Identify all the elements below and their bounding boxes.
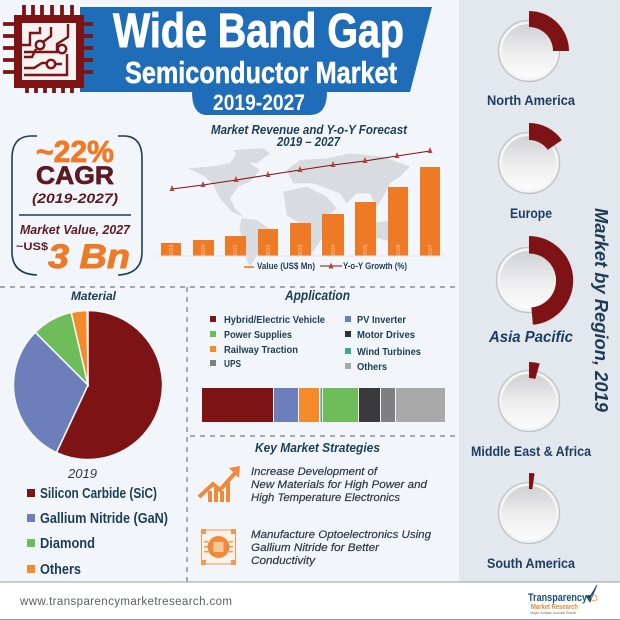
- region: Asia Pacific: [488, 236, 573, 346]
- currency prefix: ~US$: [16, 241, 48, 253]
- title banner: [80, 5, 432, 115]
- application legend: [210, 314, 421, 373]
- logo: Transparency Market Research: Market Research: [531, 602, 578, 611]
- strategy text 1: Increase Development of: [251, 466, 378, 478]
- icon: growth chart: [199, 466, 240, 502]
- application legend: Hybrid/Electric Vehicle: [224, 314, 325, 326]
- world map backdrop: [188, 148, 410, 267]
- region: North America: North America: [487, 93, 575, 108]
- callout: CAGR and market value: [12, 134, 142, 276]
- strategy text 1: New Materials for High Power and: [251, 479, 428, 491]
- bar year labels: 2027: [428, 244, 434, 256]
- panel: application: [202, 287, 445, 422]
- region: Europe: [498, 123, 562, 221]
- logo: Transparency Market Research: Insight. Analysis. Accurate Results: [530, 611, 576, 615]
- application legend: Wind Turbines: [357, 346, 421, 358]
- panel: material: [13, 289, 168, 578]
- application legend: Motor Drives: [357, 329, 415, 341]
- growth line: [170, 147, 432, 191]
- material legend: Diamond: [40, 536, 95, 552]
- region: Asia Pacific: Asia Pacific: [488, 329, 573, 346]
- panel: key market strategies: [199, 441, 432, 567]
- material legend: Silicon Carbide (SiC): [40, 486, 157, 502]
- title years: 2019-2027: [213, 90, 305, 115]
- title line 2: Semiconductor Market: [125, 55, 397, 90]
- bar year labels: 2023: [298, 244, 304, 256]
- material heading: Material: [71, 289, 117, 303]
- logo: Transparency Market Research: Transparency: [528, 592, 588, 604]
- chart legend: Value (US$ Mn): [257, 261, 315, 272]
- bar year labels: 2024: [331, 244, 337, 256]
- CAGR period: (2019-2027): [32, 190, 118, 206]
- bar year labels: [169, 244, 434, 256]
- strategy text 1: High Temperature Electronics: [251, 492, 401, 504]
- bar year labels: 2022: [266, 244, 272, 256]
- strategies heading: Key Market Strategies: [255, 441, 380, 455]
- title line 1: Wide Band Gap: [113, 5, 404, 58]
- chart legend: [244, 261, 407, 272]
- strategy text 1: [251, 466, 428, 504]
- CAGR label: CAGR: [36, 162, 114, 190]
- strategy text 2: Manufacture Optoelectronics Using: [251, 529, 432, 541]
- bar year labels: 2026: [396, 244, 402, 256]
- region: Middle East and Africa: Middle East & Africa: [471, 444, 591, 459]
- application legend: Railway Traction: [224, 344, 298, 356]
- panel: right region background: [459, 0, 620, 582]
- strategy text 2: Gallium Nitride for Better: [251, 542, 380, 554]
- application legend: PV Inverter: [357, 314, 406, 326]
- bar year labels: 2020: [201, 244, 207, 256]
- material legend: Gallium Nitride (GaN): [40, 511, 168, 527]
- bars: [161, 167, 440, 256]
- region: South America: [487, 473, 575, 571]
- market value label: Market Value, 2027: [20, 222, 131, 237]
- chart heading: Market Revenue and Y-o-Y Forecast: [211, 123, 408, 137]
- region: Middle East and Africa: [471, 362, 591, 459]
- website address: www.transparencymarketresearch.com: [19, 596, 232, 608]
- region: South America: South America: [487, 556, 575, 571]
- application legend: UPS: [224, 358, 241, 370]
- bar year labels: 2019: [169, 244, 175, 256]
- application heading: Application: [284, 287, 350, 303]
- stacked bar: [202, 388, 445, 422]
- pie chart: [13, 310, 163, 460]
- material legend: [27, 486, 168, 578]
- vertical heading: market by region: Market by Region, 2019: [591, 208, 611, 412]
- region: North America: [487, 11, 575, 108]
- application legend: Others: [357, 361, 387, 373]
- strategy text 2: Conductivity: [251, 555, 317, 567]
- logo: Transparency Market Research: [528, 585, 597, 615]
- chart heading: [211, 123, 408, 149]
- market value figure: 3 Bn: [48, 238, 130, 276]
- region: Europe: Europe: [510, 206, 552, 221]
- strategy text 2: [251, 529, 432, 567]
- material legend: Others: [40, 562, 81, 578]
- CAGR percent: ~22%: [36, 134, 114, 169]
- pie year: 2019: [67, 466, 97, 481]
- application legend: Power Supplies: [224, 329, 292, 341]
- icon: circuit chip: [3, 5, 93, 93]
- bar year labels: 2025: [363, 244, 369, 256]
- footer: [0, 582, 620, 620]
- chart: market revenue and growth forecast: [155, 123, 445, 272]
- bar year labels: 2021: [233, 244, 239, 256]
- icon: orange chip: [201, 529, 236, 565]
- chart legend: Y-o-Y Growth (%): [343, 261, 407, 272]
- chart heading: 2019 – 2027: [276, 135, 341, 149]
